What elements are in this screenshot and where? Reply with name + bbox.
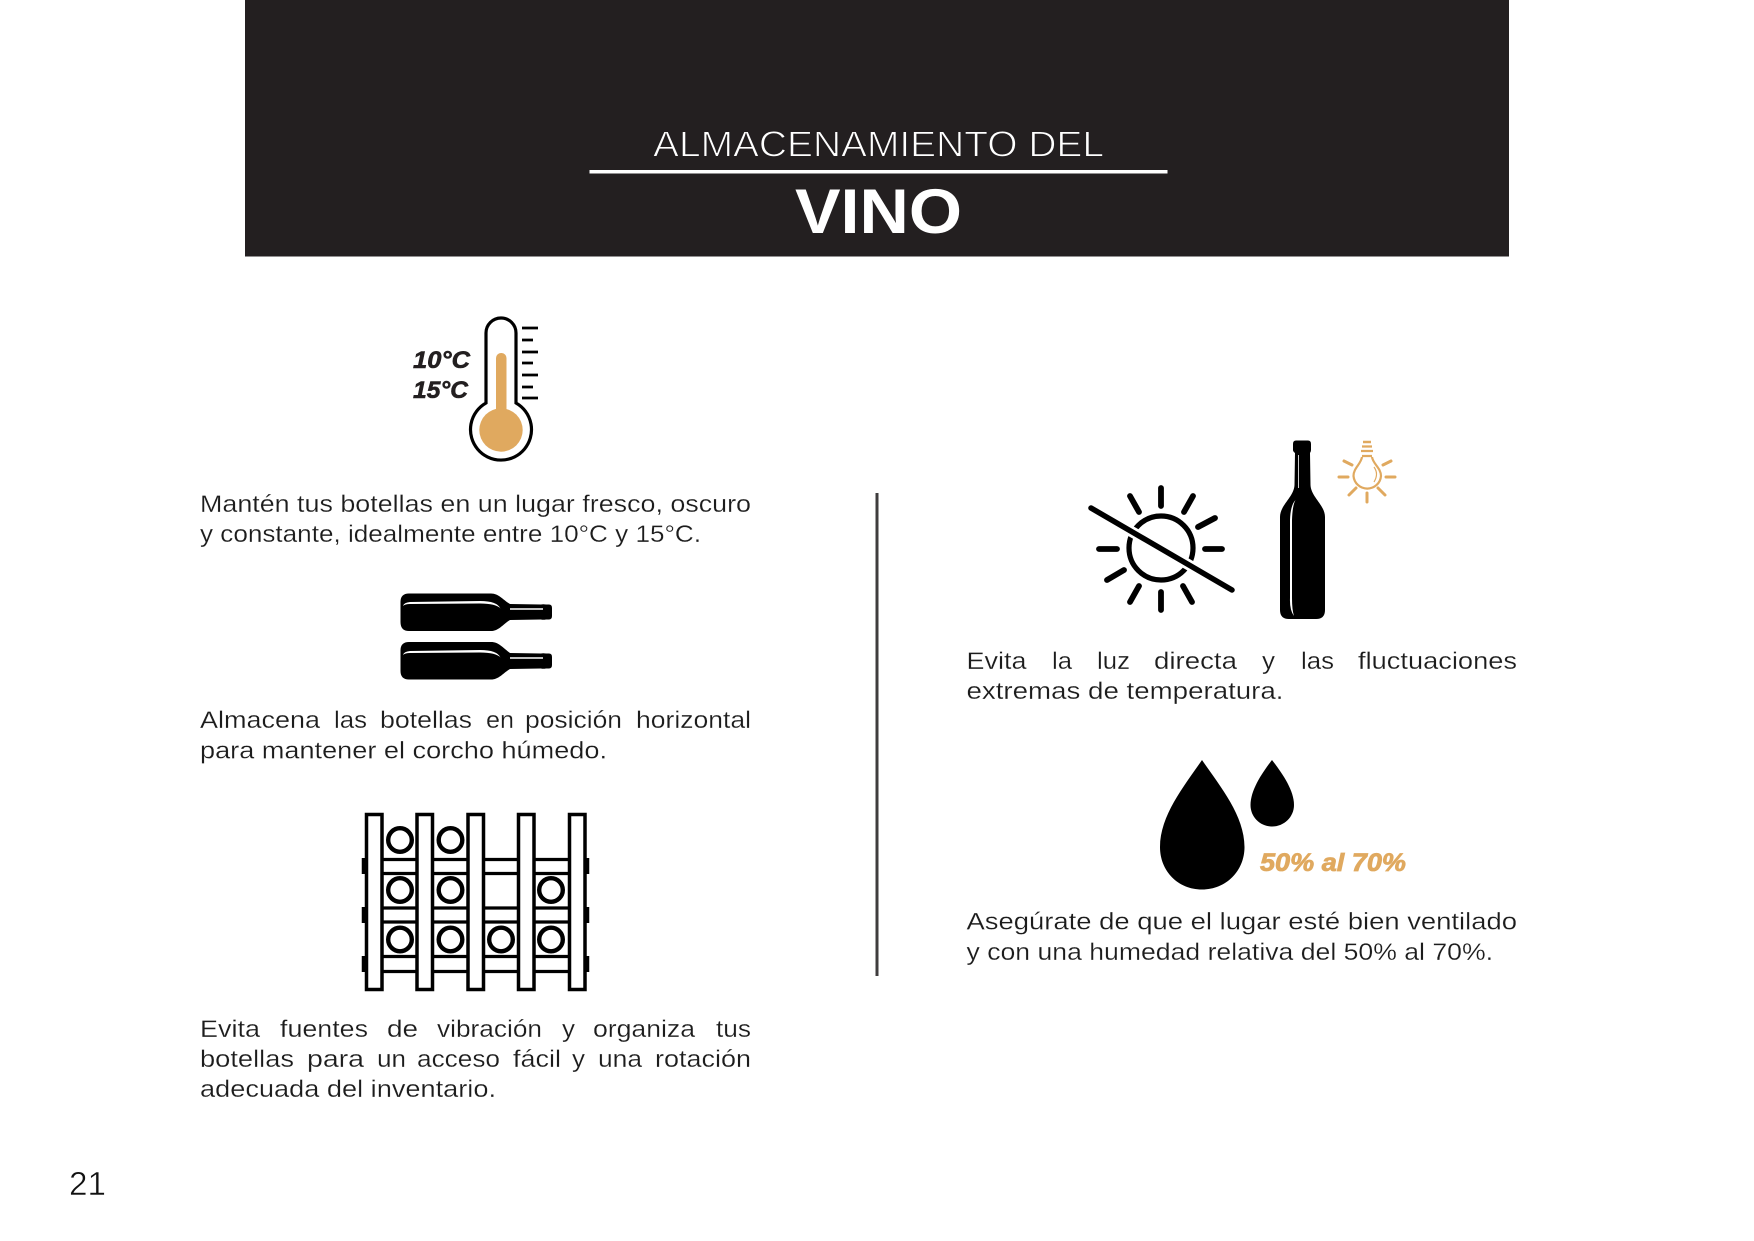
header banner: [245, 0, 1509, 256]
text: evita luz: la: [1052, 648, 1073, 675]
text: evita vibración: fuentes: [280, 1016, 368, 1043]
text: almacena: para mantener el corcho húmedo.: [200, 738, 607, 764]
icon: no sunlight: [1091, 488, 1232, 610]
text: ventilado: y con una humedad relativa del 50% al 70%.: [966, 939, 1493, 966]
text: mantén: y constante, idealmente entre 10°C y 15°C.: [200, 521, 701, 548]
callout: humidity: 50% al 70%: [1260, 849, 1406, 877]
icon: water drops: [1160, 760, 1294, 890]
page number: 21: [69, 1165, 106, 1202]
text: almacena: posición: [525, 707, 622, 734]
text: evita luz: y: [1262, 648, 1275, 675]
text: evita vibración: y: [562, 1016, 575, 1043]
divider: [876, 493, 878, 976]
heading: vino: VINO: [795, 177, 962, 247]
text: evita luz: directa: [1154, 648, 1238, 675]
text: evita vibración: un: [377, 1046, 406, 1073]
text: evita vibración: organiza: [593, 1016, 696, 1043]
heading: almacenamiento del: ALMACENAMIENTO DEL: [653, 124, 1104, 164]
text: almacena: Almacena: [200, 707, 321, 734]
text: almacena: botellas: [380, 707, 472, 734]
icon: thermometer: 15°C: [413, 377, 469, 404]
text: mantén: Mantén tus botellas en un lugar fresco, oscuro: [200, 491, 751, 518]
text: evita vibración: de: [387, 1016, 418, 1043]
icon: wine rack: [364, 814, 587, 990]
text: ventilado: Asegúrate de que el lugar esté bien ventilado: [966, 908, 1517, 936]
text: evita luz: Evita: [966, 648, 1027, 675]
icon: horizontal bottles: [400, 594, 552, 680]
text: evita luz: las: [1301, 648, 1334, 675]
icon: light bulb: [1339, 442, 1395, 502]
text: evita vibración: botellas: [200, 1046, 294, 1073]
text: evita vibración: vibración: [437, 1016, 542, 1043]
text: evita vibración: para: [307, 1046, 365, 1073]
text: evita vibración: adecuada del inventario.: [200, 1076, 496, 1103]
text: almacena: en: [486, 707, 514, 734]
icon: thermometer: 10°C: [413, 347, 471, 374]
text: almacena: horizontal: [636, 707, 751, 734]
text: evita luz: luz: [1097, 648, 1130, 675]
text: evita luz: fluctuaciones: [1358, 648, 1517, 675]
text: evita luz: extremas de temperatura.: [966, 678, 1284, 705]
text: evita vibración: fácil: [513, 1046, 561, 1073]
text: almacena: las: [334, 707, 367, 734]
text: evita vibración: acceso: [417, 1046, 500, 1073]
text: evita vibración: Evita: [200, 1016, 261, 1043]
text: evita vibración: rotación: [655, 1046, 751, 1073]
text: evita vibración: y: [572, 1046, 585, 1073]
text: evita vibración: una: [598, 1046, 643, 1073]
icon: upright bottle: [1280, 440, 1325, 619]
icon: thermometer: [413, 318, 538, 460]
text: evita vibración: tus: [716, 1016, 751, 1043]
